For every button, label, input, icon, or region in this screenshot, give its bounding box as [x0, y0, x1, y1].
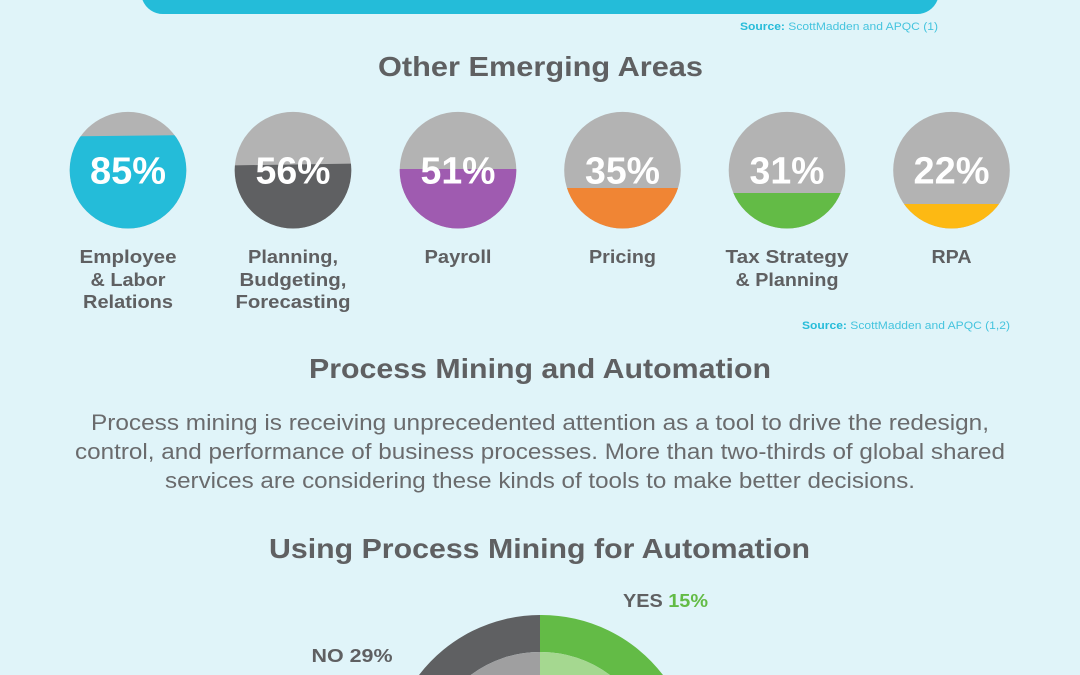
gauge: RPA 22%: 22% [914, 150, 990, 192]
gauge: employee and labor relations 85%: & Labor [90, 269, 166, 290]
gauge: payroll 51%: 51% [420, 150, 496, 192]
gauge: RPA 22% [893, 112, 1010, 263]
gauge: planning, budgeting, forecasting 56% [234, 112, 352, 312]
gauge: payroll 51%: Payroll [424, 246, 492, 267]
gauge: planning, budgeting, forecasting 56%: Budgeting, [240, 269, 346, 290]
gauge: planning, budgeting, forecasting 56%: Planning, [248, 246, 338, 267]
body paragraph: services are considering these kinds of tools to make better decisions. [165, 468, 915, 493]
source: emerging areas: Source: ScottMadden and APQC (1,2) [802, 320, 1010, 332]
gauge: pricing 35%: Pricing [589, 246, 656, 267]
gauge: planning, budgeting, forecasting 56%: 56% [256, 150, 330, 192]
gauge: tax strategy and planning 31% [719, 112, 855, 290]
gauge: tax strategy and planning 31%: & Planning [736, 269, 838, 290]
body paragraph: control, and performance of business processes. More than two-thirds of global shared [75, 439, 1005, 464]
gauge: tax strategy and planning 31%: 31% [750, 150, 824, 192]
source: top banner: Source: ScottMadden and APQC (1) [740, 21, 938, 33]
label: yes 15%: YES 15% [623, 590, 708, 611]
gauge: employee and labor relations 85%: 85% [90, 150, 166, 192]
gauge: pricing 35% [564, 112, 681, 267]
gauge: pricing 35%: 35% [585, 150, 660, 192]
donut chart: process mining [419, 615, 663, 675]
heading: other emerging areas: Other Emerging Areas [378, 51, 703, 82]
heading: using process mining for automation: Using Process Mining for Automation [269, 533, 810, 564]
gauge: tax strategy and planning 31%: Tax Strategy [726, 246, 849, 267]
gauge: employee and labor relations 85%: Employee [80, 246, 176, 267]
gauge: employee and labor relations 85%: Relations [83, 291, 173, 312]
body paragraph: Process mining is receiving unprecedented attention as a tool to drive the redesign, [91, 410, 989, 435]
heading: process mining and automation: Process Mining and Automation [309, 353, 771, 384]
gauge: employee and labor relations 85% [70, 112, 186, 308]
gauge: RPA 22%: RPA [932, 246, 972, 267]
gauge: payroll 51% [400, 112, 516, 267]
top banner bar [142, 0, 938, 14]
body paragraph [75, 410, 1005, 493]
gauge: planning, budgeting, forecasting 56%: Forecasting [236, 291, 350, 312]
label: no 29%: NO 29% [312, 645, 392, 666]
